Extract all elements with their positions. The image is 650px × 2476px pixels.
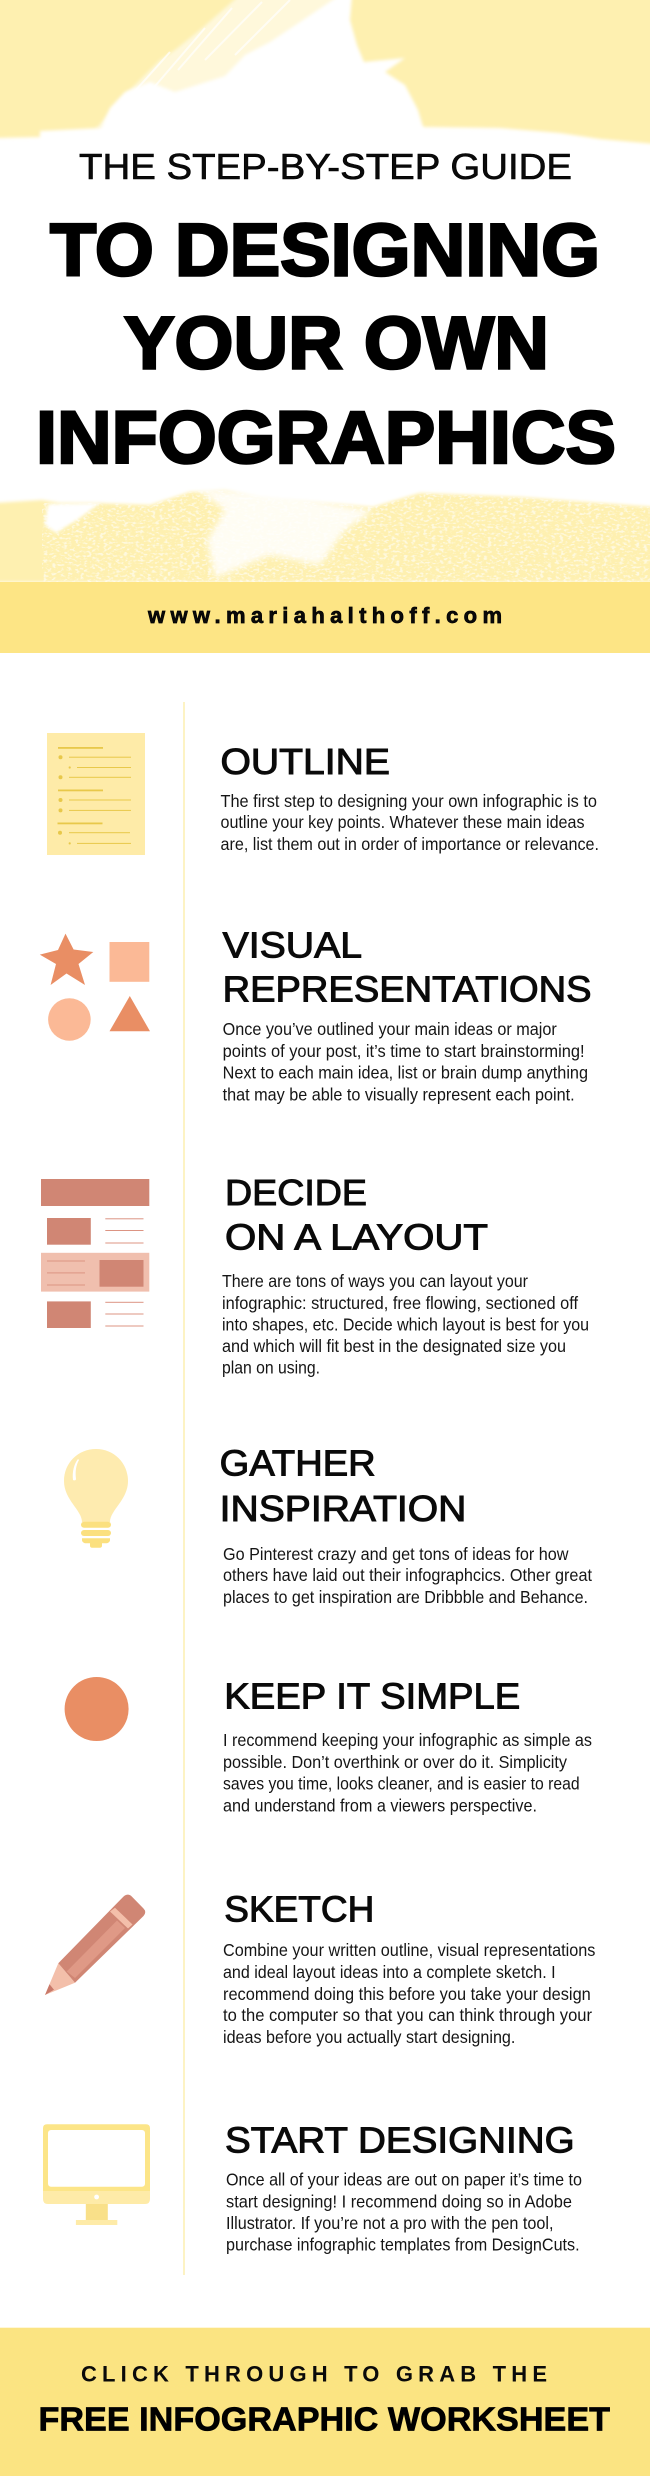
body: keep it simple: and understand from a viewers perspective. (223, 1795, 537, 1815)
title line 3: INFOGRAPHICS (36, 396, 616, 479)
body: sketch: recommend doing this before you take your design (223, 1984, 591, 2004)
body: start designing (226, 2170, 582, 2255)
body: gather inspiration (223, 1544, 592, 1607)
body: gather inspiration: others have laid out their infographcics. Other great (223, 1565, 592, 1585)
body: decide on a layout: and which will fit best in the designated size you (222, 1336, 566, 1356)
footer line 2: FREE INFOGRAPHIC WORKSHEET (38, 2402, 611, 2439)
body: sketch: to the computer so that you can think through your (223, 2005, 592, 2025)
subtitle line: THE STEP-BY-STEP GUIDE (79, 146, 572, 187)
body: decide on a layout: There are tons of ways you can layout your (222, 1271, 528, 1291)
heading: outline: OUTLINE (220, 741, 390, 782)
body: outline: The first step to designing your own infographic is to (220, 791, 597, 811)
icon: page layout (41, 1179, 149, 1328)
heading: gather inspiration (220, 1443, 466, 1529)
body: start designing: purchase infographic templates from DesignCuts. (226, 2235, 580, 2255)
icon: pencil (45, 1895, 145, 1995)
icon: shapes (40, 934, 150, 1041)
body: outline: outline your key points. Whatever these main ideas (220, 812, 585, 832)
body: decide on a layout (222, 1271, 589, 1377)
heading: sketch: SKETCH (224, 1888, 374, 1930)
title (36, 146, 616, 479)
body: visual representations: Next to each main idea, list or brain dump anything (223, 1063, 588, 1083)
heading: visual representations: REPRESENTATIONS (223, 968, 592, 1009)
icon: circle (65, 1677, 129, 1741)
footer call to action (0, 2328, 650, 2476)
step: outline (47, 733, 599, 855)
heading: decide on a layout: ON A LAYOUT (225, 1217, 488, 1258)
heading: visual representations (223, 925, 592, 1009)
footer line 1: CLICK THROUGH TO GRAB THE (81, 2362, 547, 2387)
icon: desktop monitor (43, 2124, 150, 2225)
header brush background (0, 0, 650, 582)
body: outline: are, list them out in order of importance or relevance. (220, 834, 599, 854)
title line 1: TO DESIGNING (50, 208, 600, 292)
body: visual representations (223, 1019, 588, 1104)
heading: decide on a layout (225, 1172, 488, 1258)
body: sketch: Combine your written outline, visual representations (223, 1940, 596, 1960)
body: visual representations: that may be able to visually represent each point. (223, 1084, 575, 1104)
title line 2: YOUR OWN (124, 302, 549, 384)
step: sketch (45, 1888, 596, 2047)
body: gather inspiration: Go Pinterest crazy and get tons of ideas for how (223, 1544, 569, 1564)
step: decide on a layout (41, 1172, 589, 1377)
body: start designing: Once all of your ideas are out on paper it’s time to (226, 2170, 582, 2190)
body: keep it simple (223, 1730, 592, 1815)
body: start designing: start designing! I recommend doing so in Adobe (226, 2192, 572, 2212)
step: start designing (43, 2119, 582, 2255)
heading: decide on a layout: DECIDE (225, 1172, 367, 1213)
website banner (0, 582, 650, 653)
body: gather inspiration: places to get inspiration are Dribbble and Behance. (223, 1587, 588, 1607)
body: sketch: and ideal layout ideas into a complete sketch. I (223, 1962, 556, 1982)
icon: outline document (47, 733, 145, 855)
body: outline (220, 791, 599, 854)
body: keep it simple: I recommend keeping your infographic as simple as (223, 1730, 592, 1750)
icon: light bulb (64, 1449, 128, 1548)
heading: visual representations: VISUAL (223, 925, 362, 966)
step: keep it simple (65, 1675, 592, 1815)
body: decide on a layout: plan on using. (222, 1357, 320, 1377)
timeline divider (183, 702, 185, 2275)
body: keep it simple: possible. Don’t overthink or over do it. Simplicity (223, 1752, 567, 1772)
body: sketch: ideas before you actually start designing. (223, 2027, 515, 2047)
website url: www.mariahalthoff.com (147, 603, 502, 628)
body: keep it simple: saves you time, looks cleaner, and is easier to read (223, 1774, 580, 1794)
step: gather inspiration (64, 1443, 592, 1607)
heading: keep it simple: KEEP IT SIMPLE (224, 1675, 520, 1716)
body: start designing: Illustrator. If you’re not a pro with the pen tool, (226, 2213, 554, 2233)
heading: gather inspiration: GATHER (220, 1443, 376, 1484)
body: visual representations: points of your post, it’s time to start brainstorming! (223, 1041, 585, 1061)
heading: gather inspiration: INSPIRATION (220, 1488, 466, 1529)
body: decide on a layout: infographic: structured, free flowing, sectioned off (222, 1293, 578, 1313)
heading: start designing: START DESIGNING (225, 2119, 575, 2160)
body: visual representations: Once you’ve outlined your main ideas or major (223, 1019, 557, 1039)
body: sketch (223, 1940, 596, 2047)
step: visual representations (40, 925, 592, 1104)
body: decide on a layout: into shapes, etc. Decide which layout is best for you (222, 1314, 589, 1334)
